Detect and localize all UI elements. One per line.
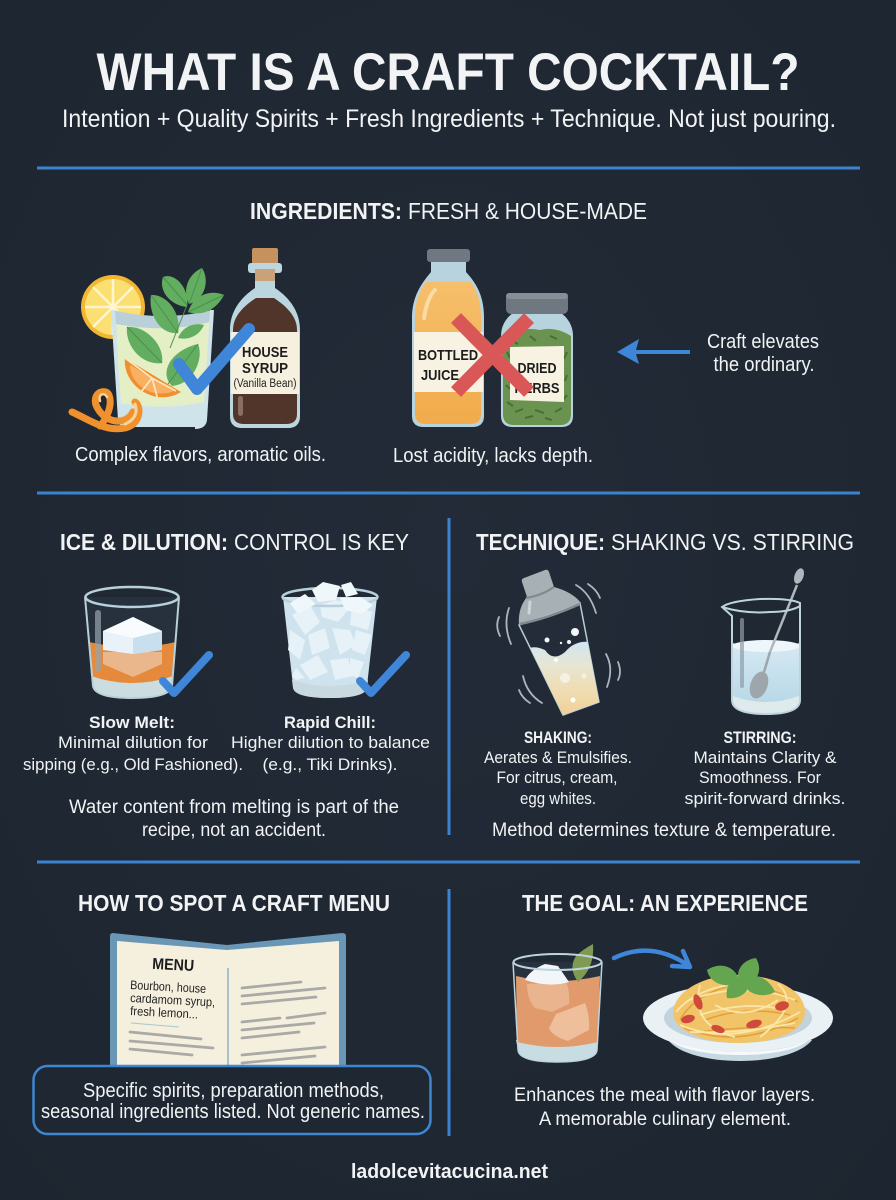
icon: cocktail glass with mint and orange [113,310,212,427]
text: shaking [484,729,632,808]
text: slow melt: Minimal dilution for [58,734,209,752]
icon: cocktail with ice [513,944,602,1062]
text: slow melt: sipping (e.g., Old Fashioned). [23,756,243,774]
icon: mixing glass with bar spoon [722,567,806,714]
text: shaking: Aerates & Emulsifies. [484,749,632,767]
heading: ingredients [250,198,647,224]
text: rapid chill: Rapid Chill: [284,714,376,732]
text: rapid chill [231,714,430,774]
panel: how to spot a craft menu [34,890,430,1134]
heading: ice and dilution [60,529,409,555]
title: WHAT IS A CRAFT COCKTAIL? [96,43,800,102]
heading: ice and dilution: ICE & DILUTION: [60,529,228,555]
text: rapid chill: (e.g., Tiki Drinks). [262,756,398,774]
text: stirring [684,729,846,808]
footer: website: ladolcevitacucina.net [351,1161,548,1183]
icon: dried herbs jar: DRIED [518,360,557,377]
text: slow melt: Slow Melt: [89,714,175,732]
text: shaking: For citrus, cream, [496,769,618,787]
text: craft elevates [707,331,819,376]
text: slow melt [23,714,243,774]
text: shaking: SHAKING: [524,729,592,747]
heading: technique [476,529,854,555]
heading: technique: TECHNIQUE: [476,529,605,555]
icon: blue check mark [179,329,249,389]
icon: open menu: Bourbon, house [130,978,207,996]
arrow: pointing left [617,339,690,364]
icon: plate of spaghetti [643,958,833,1061]
callout: specific spirits: Specific spirits, preparation methods, [83,1080,384,1102]
icon: open menu [110,933,346,1070]
heading: ingredients: FRESH & HOUSE-MADE [408,198,647,224]
icon: dried herbs jar [501,293,573,427]
heading: ice and dilution: CONTROL IS KEY [234,529,409,555]
icon: dried herbs jar: HERBS [514,380,560,397]
icon: orange peel [72,392,139,429]
text: rapid chill: Higher dilution to balance [231,734,430,752]
icon: mint sprig [151,268,224,348]
icon: open menu: cardamom syrup, [130,991,215,1009]
icon: red X [456,318,529,392]
heading: technique: SHAKING VS. STIRRING [611,529,854,555]
panel: the goal [513,890,833,1130]
caption: lost acidity: Lost acidity, lacks depth. [393,445,593,467]
panel: ingredients [72,198,819,467]
text: enhances the meal [514,1085,815,1130]
text: stirring: spirit-forward drinks. [684,790,846,808]
heading: craft menu: HOW TO SPOT A CRAFT MENU [78,890,390,916]
icon: check mark rapid chill [360,655,406,693]
icon: open menu: MENU [152,956,195,975]
icon: house syrup bottle: (Vanilla Bean) [234,378,297,390]
subtitle: Intention + Quality Spirits + Fresh Ingredients + Technique. Not just pouring. [62,105,836,133]
icon: lemon slice [81,275,145,339]
callout: specific spirits: seasonal ingredients listed. Not generic names. [41,1101,425,1123]
text: craft elevates: the ordinary. [714,354,814,376]
text: enhances the meal: A memorable culinary element. [539,1109,791,1130]
text: water content note: recipe, not an accident. [142,820,326,841]
callout: specific spirits [34,1066,430,1134]
panel: ice and dilution [23,529,430,841]
text: enhances the meal: Enhances the meal with flavor layers. [514,1085,815,1106]
text: method note: Method determines texture & temperature. [492,820,836,841]
panel: technique [476,529,854,841]
icon: house syrup bottle: SYRUP [242,360,288,377]
text: water content note: Water content from melting is part of the [69,797,399,818]
text: stirring: Smoothness. For [699,769,821,787]
icon: glass filled with crushed ice [282,582,378,698]
icon: bottled juice: JUICE [421,367,459,384]
icon: house syrup bottle [230,248,300,428]
text: water content note [69,797,399,841]
icon: bottled juice: BOTTLED [418,347,478,364]
icon: check mark slow melt [163,655,209,693]
caption: complex flavors: Complex flavors, aromatic oils. [75,444,326,466]
icon: cocktail shaker [519,570,605,720]
icon: house syrup bottle: HOUSE [242,344,288,361]
text: stirring: Maintains Clarity & [694,749,836,767]
heading: the goal: THE GOAL: AN EXPERIENCE [522,890,808,916]
text: craft elevates: Craft elevates [707,331,819,353]
heading: ingredients: INGREDIENTS: [250,198,402,224]
icon: shake motion lines [497,584,620,703]
icon: open menu: fresh lemon... [130,1004,198,1022]
text: stirring: STIRRING: [724,729,796,747]
icon: bottled juice [412,249,484,427]
text: shaking: egg whites. [520,790,596,808]
arrow: cocktail to pasta [614,951,690,967]
icon: rocks glass with large cube [85,587,179,698]
